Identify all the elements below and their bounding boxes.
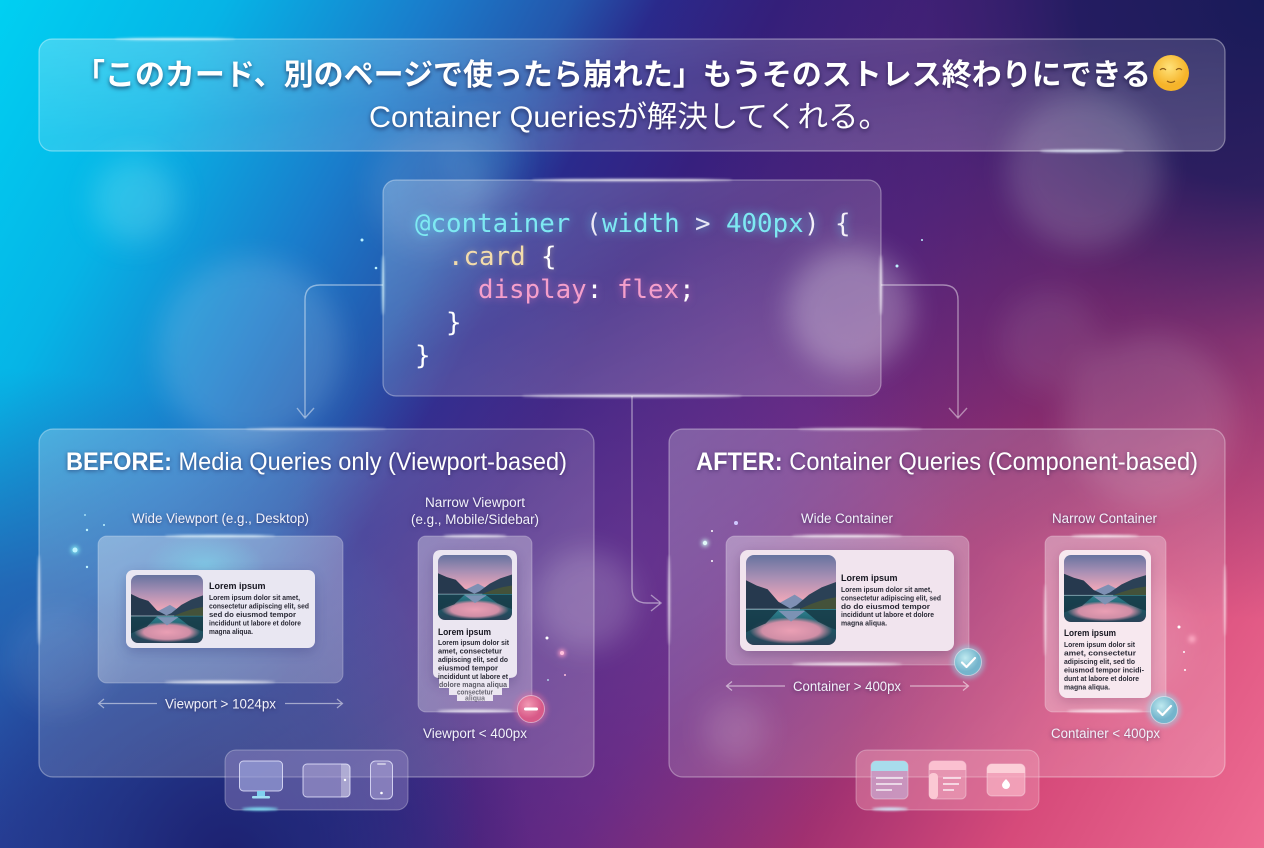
card: narrow container: eiusmod tempor incidi-	[1064, 666, 1144, 674]
panel: layout icons tray	[856, 750, 1039, 810]
card: wide viewport: magna aliqua.	[209, 627, 253, 636]
arrow: code to after panel	[881, 285, 967, 418]
card: wide container	[740, 550, 954, 651]
label: viewport under 400: Viewport < 400px	[423, 726, 527, 741]
heading: before: BEFORE: Media Queries only (Viewport-based)	[66, 448, 567, 476]
code text: width	[602, 209, 680, 239]
card: wide viewport: incididunt ut labore et dolore	[209, 618, 301, 628]
wide container box	[726, 535, 969, 665]
code text: (	[586, 209, 602, 239]
card: wide container: do do eiusmod tempor	[841, 602, 930, 611]
panel: before	[38, 428, 594, 777]
icon: tablet	[303, 764, 350, 797]
icon: phone	[370, 761, 392, 799]
arrow: code to before panel	[297, 285, 383, 418]
label: viewport over 1024: Viewport > 1024px	[165, 696, 276, 712]
card: wide container: incididunt ut labore et dolore	[841, 610, 934, 619]
code text: )	[804, 209, 820, 239]
label: narrow viewport: (e.g., Mobile/Sidebar)	[411, 512, 539, 527]
arrow: viewport width wide	[98, 699, 342, 708]
label: narrow viewport: Narrow Viewport	[425, 495, 525, 510]
card: broken overflowing card: dolore magna aliqua	[439, 680, 508, 689]
icon: minus badge	[514, 692, 548, 726]
card: broken overflowing card: Lorem ipsum dolor sit	[438, 638, 509, 647]
card: broken overflowing card: incididunt ut labore et	[438, 672, 508, 681]
code text: {	[541, 242, 557, 272]
card: wide container: Lorem ipsum	[841, 573, 898, 583]
label: wide container: Wide Container	[801, 511, 893, 526]
heading: after: AFTER: Container Queries (Component-based)	[696, 448, 1198, 476]
code text: {	[835, 209, 851, 239]
narrow viewport container	[418, 535, 532, 712]
code text: flex	[617, 275, 679, 305]
label: narrow viewport	[411, 495, 539, 527]
card: wide viewport: Lorem ipsum dolor sit amet,	[209, 593, 300, 602]
code text: 400px	[726, 209, 804, 239]
card: narrow container: adipiscing elit, sed tlo	[1064, 657, 1135, 666]
card: narrow container	[1059, 550, 1151, 698]
card: wide container: magna aliqua.	[841, 618, 887, 628]
label: container under 400: Container < 400px	[1051, 726, 1160, 741]
heading: title text: 「このカード、別のページで使ったら崩れた」もうそのストレス終わりにできる	[75, 59, 1151, 92]
code text: >	[695, 209, 711, 239]
code text: @container	[415, 209, 570, 239]
card: broken overflowing card: consectetur	[457, 688, 493, 696]
panel: title banner	[39, 38, 1225, 152]
arrow: code to after card	[632, 396, 661, 611]
card: narrow container: amet, consectetur	[1064, 648, 1136, 658]
icon: check badge wide	[951, 645, 985, 679]
card: broken overflowing card: amet, consectetur	[438, 646, 502, 656]
code text: }	[446, 308, 462, 338]
sparkle particles	[71, 238, 1196, 681]
card: wide viewport: sed do eiusmod tempor	[209, 610, 296, 619]
icon: check badge narrow	[1147, 693, 1181, 727]
narrow container box	[1044, 535, 1166, 712]
card: broken overflowing card: adipiscing elit, sed do	[438, 655, 508, 664]
icon: sidebar layout	[929, 761, 966, 799]
card: broken overflowing card: aliqua	[465, 694, 486, 702]
heading: title text: Container Queriesが解決してくれる。	[369, 101, 889, 134]
label: wide viewport: Wide Viewport (e.g., Desktop)	[132, 511, 309, 526]
code text: ;	[679, 275, 695, 305]
panel: code snippet	[382, 179, 882, 397]
card: narrow container: dunt at labore et dolore	[1064, 674, 1139, 683]
icon: desktop monitor	[240, 761, 282, 798]
code text: }	[415, 341, 431, 371]
card: wide viewport: consectetur adipiscing elit, sed	[209, 602, 309, 610]
panel: after	[668, 428, 1226, 777]
code text	[415, 209, 851, 371]
card: broken overflowing card: eiusmod tempor	[438, 664, 498, 672]
card: wide viewport	[126, 570, 315, 648]
icon: image card layout	[987, 764, 1025, 796]
arrow: container width wide	[726, 682, 968, 690]
wide viewport container	[98, 533, 343, 683]
card: narrow container: Lorem ipsum dolor sit	[1064, 640, 1135, 649]
code text: .card	[448, 242, 526, 272]
label: narrow container: Narrow Container	[1052, 511, 1157, 526]
card: broken overflowing card: Lorem ipsum	[438, 627, 491, 637]
panel: device icons tray	[225, 750, 408, 810]
icon: text layout	[871, 761, 908, 799]
card: wide container: Lorem ipsum dolor sit amet,	[841, 585, 932, 594]
code text: display:	[478, 275, 602, 305]
card: wide container: consectetur adipiscing elit, sed	[841, 594, 941, 602]
heading: title text	[75, 59, 1151, 134]
card: narrow container: Lorem ipsum	[1064, 628, 1116, 638]
label: container over 400: Container > 400px	[793, 679, 901, 694]
card: narrow container: magna aliqua.	[1064, 682, 1110, 692]
card: broken overflowing card	[433, 550, 517, 702]
card: wide viewport: Lorem ipsum	[209, 581, 266, 591]
icon: relieved face emoji	[1153, 55, 1189, 91]
